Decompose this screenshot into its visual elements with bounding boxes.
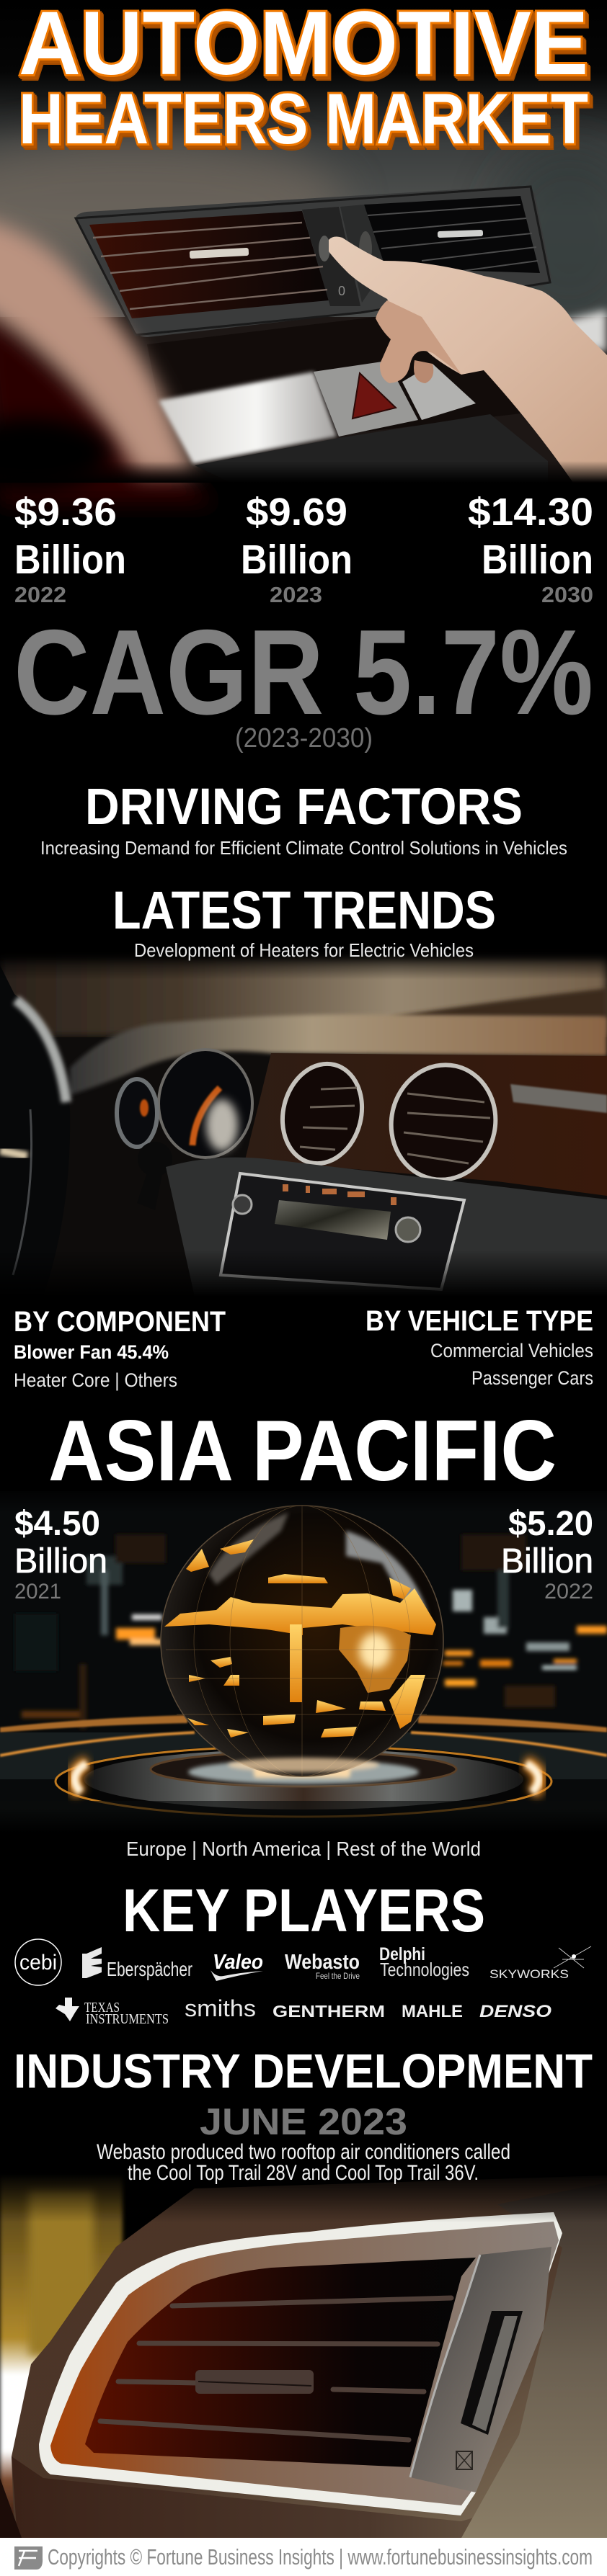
hero photo: finger on car air vent: [0, 0, 607, 504]
industry development: the Cool Top Trail 28V and Cool Top Trail 36V.: [128, 2161, 479, 2185]
regional value 2021: Billion: [14, 1542, 107, 1580]
regional value 2021: [14, 1505, 107, 1604]
regional value 2021: 2021: [14, 1580, 61, 1604]
steering wheel: [0, 965, 70, 1297]
logo: Webasto: [285, 1951, 360, 1981]
silver switch panels: [159, 361, 548, 483]
by component: Heater Core | Others: [14, 1369, 177, 1391]
by vehicle type: [365, 1305, 593, 1389]
market value 2023: 2023: [270, 582, 322, 607]
logo: Denso: DENSO: [479, 2002, 551, 2021]
logo: Delphi Technologies: [379, 1944, 469, 1980]
other regions: Europe | North America | Rest of the World: [126, 1838, 481, 1860]
regional value 2022: Billion: [501, 1542, 593, 1580]
asia pacific heading: ASIA PACIFIC: [48, 1403, 557, 1499]
CAGR: (2023-2030): [235, 723, 373, 753]
market value 2030: Billion: [482, 537, 593, 583]
logo: Skyworks: [489, 1946, 591, 1981]
hand: [329, 237, 607, 483]
gauge cluster: [117, 1050, 252, 1158]
regional value 2022: $5.20: [508, 1505, 593, 1543]
blurred arm at left: [0, 216, 216, 504]
market value 2022: 2022: [14, 582, 66, 607]
platform rings: [0, 1715, 607, 1817]
logo: Texas Instruments: [56, 1998, 169, 2027]
logo: cebi: [15, 1939, 61, 1985]
latest trends: LATEST TRENDS: [112, 880, 496, 940]
key players heading: KEY PLAYERS: [123, 1877, 485, 1944]
vent slats: [100, 2298, 451, 2440]
logo: cebi: cebi: [19, 1951, 57, 1975]
regional value 2021: $4.50: [14, 1505, 100, 1543]
vent opening: [85, 2258, 476, 2467]
regional value 2022: [501, 1505, 593, 1604]
logo: Delphi Technologies: Delphi: [379, 1944, 425, 1964]
bokeh city lights: [14, 1534, 607, 1729]
logo: Mahle: MAHLE: [402, 2002, 463, 2021]
console and radio: [166, 1158, 607, 1297]
air vent close-up photo: [0, 2172, 607, 2538]
right vent opening: [364, 196, 540, 273]
market value 2030: $14.30: [468, 491, 593, 534]
vent frame: 0: [338, 284, 345, 298]
industry development: [14, 2044, 593, 2185]
center vent controls: [302, 207, 360, 306]
market value 2022: $9.36: [14, 491, 117, 534]
adjustment panel: [410, 2247, 551, 2492]
title: [19, 0, 588, 158]
dashboard photo: [0, 949, 607, 1297]
regional value 2022: 2022: [544, 1580, 593, 1604]
logo: Eberspacher: Eberspächer: [107, 1958, 192, 1980]
industry development: Webasto produced two rooftop air conditioners called: [97, 2140, 510, 2164]
left slats: [93, 223, 327, 309]
by vehicle type: Passenger Cars: [471, 1367, 593, 1389]
industry development: JUNE 2023: [200, 2101, 407, 2143]
inner bezel: [50, 2222, 559, 2505]
logo: Eberspacher: [82, 1947, 192, 1980]
glowing globe: [161, 1506, 443, 1776]
logo: Valeo: Valeo: [213, 1951, 263, 1974]
logo: Texas Instruments: TEXAS: [84, 2000, 120, 2016]
logo: Valeo: [211, 1951, 263, 1981]
logo: Texas Instruments: INSTRUMENTS: [86, 2011, 169, 2027]
driving factors: DRIVING FACTORS: [85, 779, 523, 836]
by component: BY COMPONENT: [14, 1306, 226, 1338]
logo: Skyworks: SKYWORKS: [489, 1967, 569, 1981]
vent frame: [76, 186, 551, 337]
market value 2023: $9.69: [246, 491, 347, 534]
logo: Webasto: Webasto: [285, 1951, 360, 1974]
by component: [14, 1306, 226, 1391]
latest trends: Development of Heaters for Electric Vehicles: [134, 939, 474, 961]
right slats: [368, 205, 538, 272]
market value 2022: [14, 491, 126, 607]
left vent opening: [89, 211, 329, 318]
logo: smiths: smiths: [185, 1995, 256, 2021]
leather dashboard: [12, 2175, 607, 2538]
gear lever: [137, 1142, 172, 1210]
driving factors: Increasing Demand for Efficient Climate Control Solutions in Vehicles: [40, 837, 567, 859]
icon: Fortune Business Insights logo: [14, 2546, 43, 2570]
footer: [0, 2538, 607, 2576]
globe photo: [0, 1484, 607, 1833]
by vehicle type: Commercial Vehicles: [430, 1340, 593, 1361]
market value 2023: Billion: [241, 537, 353, 583]
logo: Webasto: Feel the Drive: [316, 1971, 360, 1981]
by component: Blower Fan 45.4%: [14, 1341, 169, 1363]
driving factors: [40, 779, 567, 859]
market value 2022: Billion: [14, 537, 126, 583]
latest trends: [112, 880, 496, 961]
market value 2030: 2030: [541, 582, 593, 607]
market value 2023: [241, 491, 353, 607]
round vents: [273, 1055, 506, 1189]
logo: Gentherm: GENTHERM: [273, 2002, 385, 2021]
chrome trim: [39, 2212, 562, 2515]
logo: Delphi Technologies: Technologies: [380, 1959, 469, 1980]
market value 2030: [468, 491, 593, 607]
